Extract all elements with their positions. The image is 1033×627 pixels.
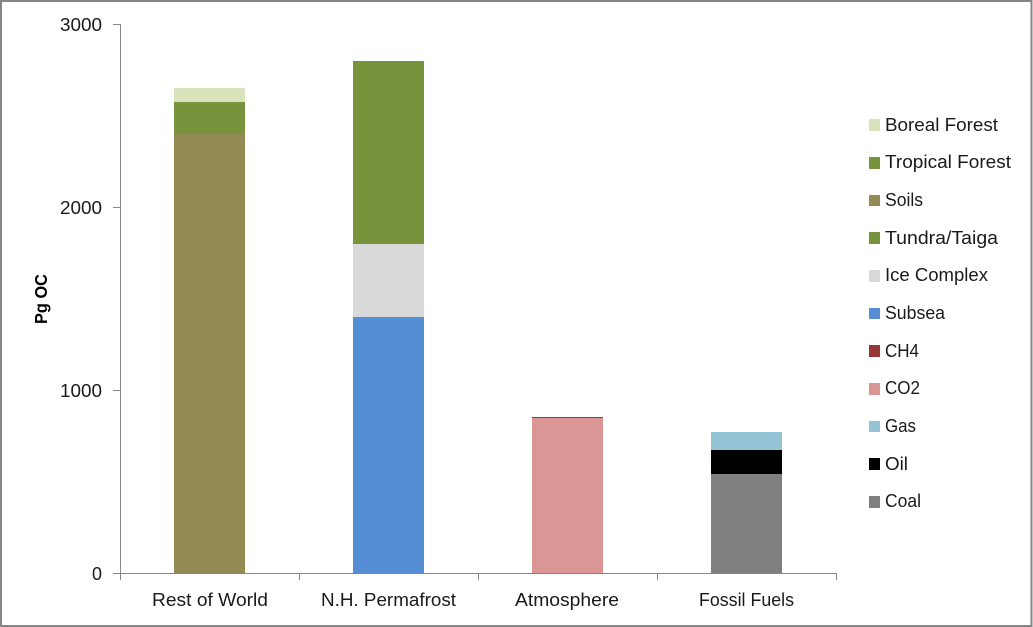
- y axis: [60, 14, 120, 584]
- legend: CH4: [885, 340, 919, 361]
- x axis: [120, 573, 836, 610]
- stacked bar: Atmosphere: [532, 417, 603, 573]
- x axis: N.H. Permafrost: [321, 589, 456, 610]
- legend: Boreal Forest: [885, 114, 998, 135]
- legend: Tropical Forest: [885, 151, 1011, 172]
- stacked bar: Fossil Fuels: [711, 432, 782, 573]
- legend: Subsea: [885, 302, 946, 323]
- y axis: 2000: [60, 197, 102, 218]
- stacked bar: N.H. Permafrost: [353, 61, 424, 573]
- legend: Oil: [885, 453, 908, 474]
- legend: CO2: [885, 377, 920, 398]
- stacked bar: Rest of World: [174, 88, 245, 573]
- legend: Coal: [885, 490, 921, 511]
- y axis: 0: [92, 563, 102, 584]
- legend: Soils: [885, 189, 923, 210]
- x axis: Atmosphere: [515, 589, 619, 610]
- legend: Ice Complex: [885, 264, 989, 285]
- x axis: Fossil Fuels: [699, 589, 794, 610]
- legend: [869, 114, 1011, 511]
- y axis: 1000: [60, 380, 102, 401]
- x axis: Rest of World: [152, 589, 268, 610]
- legend: Tundra/Taiga: [885, 227, 999, 248]
- legend: Gas: [885, 415, 916, 436]
- y axis title: Pg OC: [31, 274, 51, 324]
- y axis: 3000: [60, 14, 102, 35]
